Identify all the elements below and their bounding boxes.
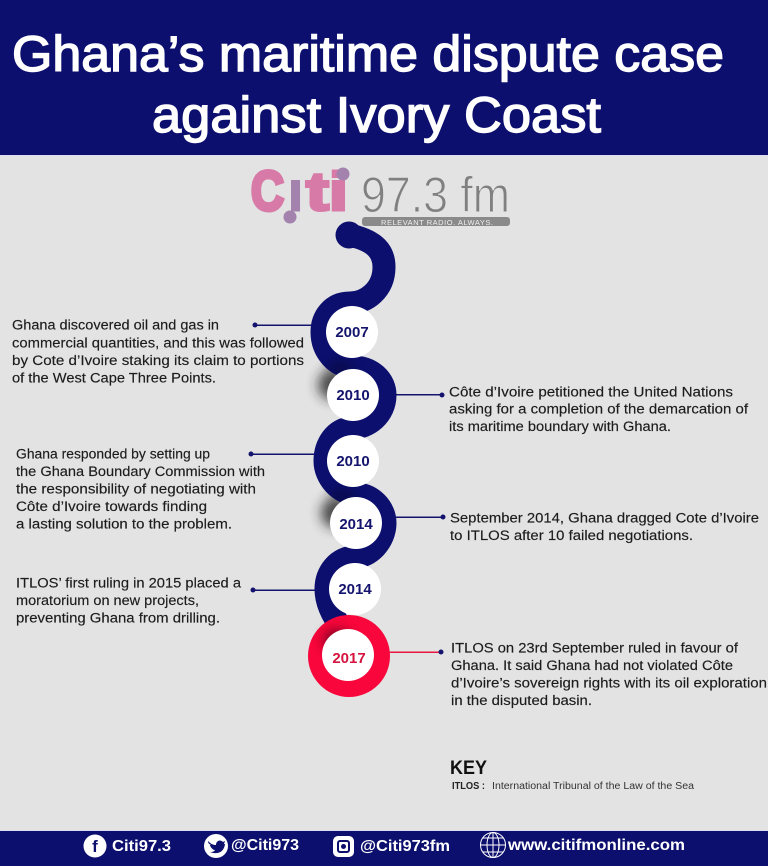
text: 2010 commission: Côte d’Ivoire towards finding bbox=[16, 499, 207, 514]
text: 2007 event: by Cote d’Ivoire staking its claim to portions bbox=[12, 353, 304, 368]
text: 2017 ruling bbox=[451, 640, 767, 708]
year node 2007: 2007 bbox=[335, 324, 369, 341]
instagram handle: @Citi973fm bbox=[360, 838, 450, 855]
text: 2017 ruling: ITLOS on 23rd September ruled in favour of bbox=[451, 640, 738, 656]
twitter handle: @Citi973 bbox=[231, 837, 299, 854]
year node 2007 bbox=[326, 306, 378, 358]
year node 2010 right bbox=[327, 369, 379, 421]
icon: twitter bbox=[204, 834, 228, 858]
logo: Citi 97.3 fm: ti bbox=[306, 162, 348, 222]
website: www.citifmonline.com bbox=[507, 837, 685, 854]
footer bar bbox=[0, 830, 768, 866]
logo: Citi 97.3 fm bbox=[251, 159, 510, 227]
text: 2010 commission: the Ghana Boundary Commission with bbox=[16, 464, 265, 479]
key bbox=[450, 758, 694, 792]
text: 2010 commission bbox=[16, 446, 265, 532]
key: ITLOS : bbox=[452, 781, 485, 792]
text: 2017 ruling: in the disputed basin. bbox=[451, 693, 592, 708]
text: ITLOS first ruling bbox=[16, 576, 242, 626]
year node 2017 bbox=[322, 629, 374, 681]
logo: Citi 97.3 fm: RELEVANT RADIO. ALWAYS. bbox=[381, 218, 493, 227]
key: KEY bbox=[450, 758, 487, 779]
text: 2007 event: commercial quantities, and this was followed bbox=[12, 336, 304, 350]
icon: facebook bbox=[84, 834, 106, 858]
logo: Citi 97.3 fm: C bbox=[251, 159, 284, 222]
winding timeline ribbon bbox=[322, 222, 385, 632]
text: ITLOS first ruling: ITLOS’ first ruling in 2015 placed a bbox=[16, 576, 242, 590]
year node 2010 left: 2010 bbox=[336, 453, 370, 470]
text: 2010 commission: a lasting solution to the problem. bbox=[16, 516, 232, 532]
header banner with title: against Ivory Coast bbox=[152, 87, 601, 143]
logo: Citi 97.3 fm: 97.3 fm bbox=[361, 167, 510, 223]
header banner with title: Ghana’s maritime dispute case bbox=[12, 26, 724, 82]
text: 2014 ITLOS filing bbox=[450, 510, 759, 543]
icon: instagram bbox=[333, 836, 354, 857]
year node 2010 right: 2010 bbox=[336, 387, 370, 404]
text: 2017 ruling: Ghana. It said Ghana had not violated Côte bbox=[451, 658, 733, 673]
year node 2014 right bbox=[330, 497, 382, 549]
icon: globe bbox=[480, 832, 506, 858]
shadow on ribbon above circles bbox=[326, 363, 356, 501]
year node 2014 left bbox=[329, 563, 381, 615]
text: 2010 commission: the responsibility of negotiating with bbox=[16, 482, 256, 496]
text: 2007 event: Ghana discovered oil and gas in bbox=[12, 318, 219, 332]
text: 2014 ITLOS filing: to ITLOS after 10 failed negotiations. bbox=[450, 528, 693, 543]
connector lines with dots bbox=[248, 322, 446, 654]
text: 2010 petition: Côte d’Ivoire petitioned the United Nations bbox=[449, 384, 733, 400]
text: ITLOS first ruling: moratorium on new projects, bbox=[16, 593, 199, 608]
text: 2010 petition bbox=[449, 384, 748, 434]
text: 2007 event: of the West Cape Three Points. bbox=[12, 370, 216, 386]
shadows behind circles bbox=[318, 370, 351, 528]
key: International Tribunal of the Law of the Sea bbox=[492, 781, 694, 792]
icon: facebook: f bbox=[92, 837, 98, 856]
text: 2010 petition: its maritime boundary with Ghana. bbox=[449, 419, 671, 434]
logo: Citi 97.3 fm: ı bbox=[289, 162, 302, 222]
red ring for 2017 bbox=[308, 615, 390, 697]
text: 2010 petition: asking for a completion of the demarcation of bbox=[449, 402, 748, 416]
text: ITLOS first ruling: preventing Ghana from drilling. bbox=[16, 610, 220, 626]
text: 2017 ruling: d’Ivoire’s sovereign rights with its oil exploration bbox=[451, 676, 767, 690]
year node 2010 left bbox=[327, 435, 379, 487]
header banner with title bbox=[0, 0, 768, 156]
year node 2014 right: 2014 bbox=[339, 516, 373, 533]
facebook handle: Citi97.3 bbox=[112, 838, 171, 855]
text: 2007 event bbox=[12, 318, 304, 386]
year node 2014 left: 2014 bbox=[338, 581, 372, 598]
text: 2014 ITLOS filing: September 2014, Ghana dragged Cote d’Ivoire bbox=[450, 510, 759, 526]
text: 2010 commission: Ghana responded by setting up bbox=[16, 446, 210, 462]
year node 2017: 2017 bbox=[332, 650, 366, 667]
